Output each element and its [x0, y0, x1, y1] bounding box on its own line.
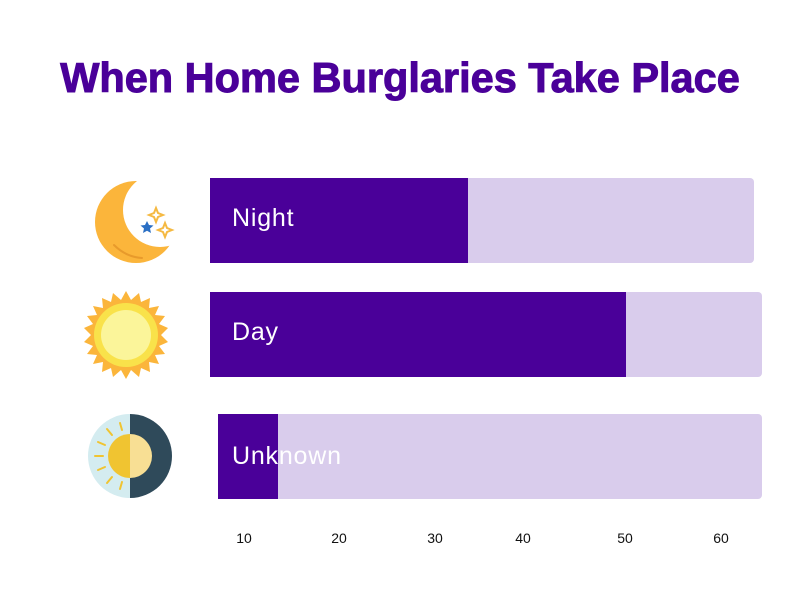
- bar: Day: [210, 292, 762, 377]
- x axis labels: 30: [427, 530, 443, 546]
- icon: day/night half circle: [88, 414, 172, 498]
- icon: sun: [84, 291, 168, 379]
- bar: Night: Night: [232, 204, 294, 232]
- icon: moon: [95, 181, 174, 263]
- bar: Night: [210, 178, 754, 263]
- bar: Day: Day: [232, 318, 279, 346]
- x axis labels: 20: [331, 530, 347, 546]
- bar: Unknown: Unknown: [232, 442, 342, 470]
- bar: Unknown: [218, 414, 762, 499]
- x axis labels: 40: [515, 530, 531, 546]
- x axis labels: 60: [713, 530, 729, 546]
- title: When Home Burglaries Take Place: [60, 54, 740, 101]
- x axis labels: 50: [617, 530, 633, 546]
- x axis labels: [236, 530, 729, 546]
- x axis labels: 10: [236, 530, 252, 546]
